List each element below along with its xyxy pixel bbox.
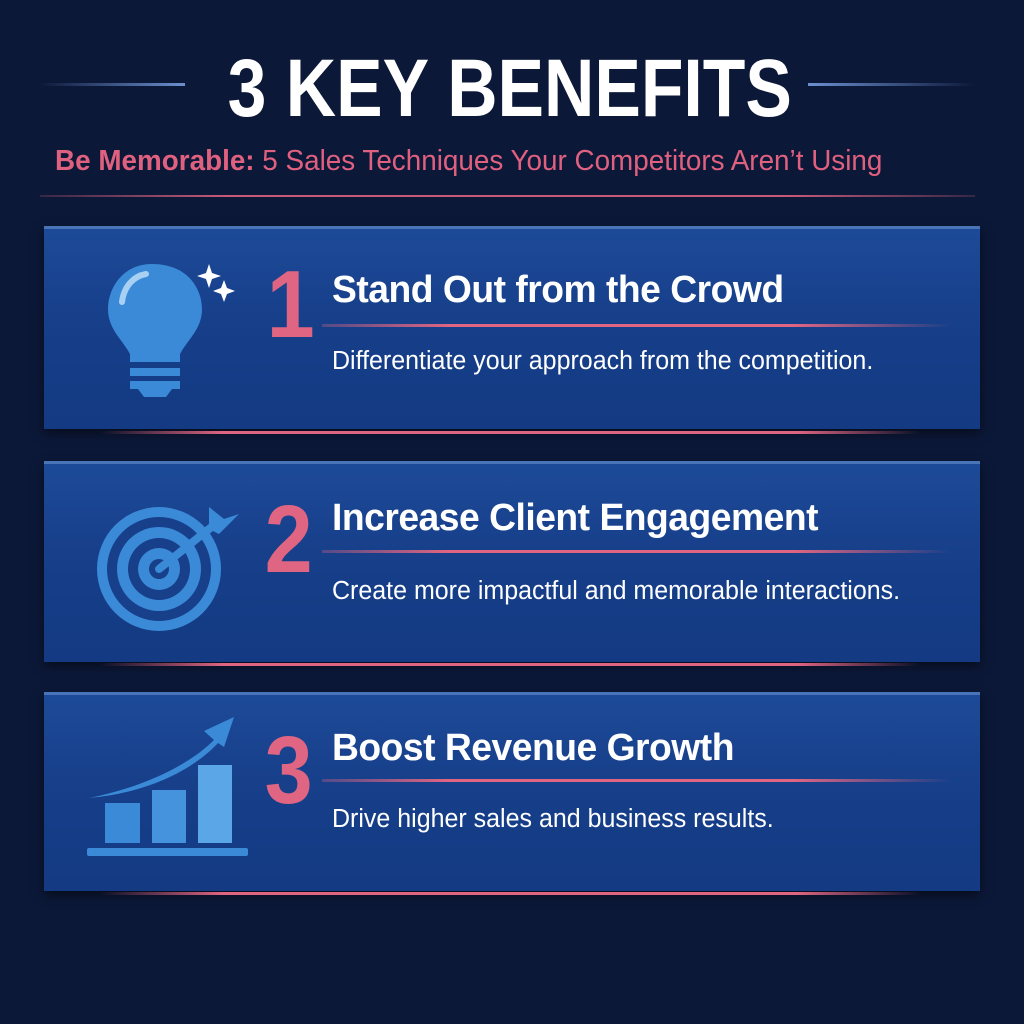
icon: target (97, 507, 239, 631)
icon: bar chart growth (87, 717, 248, 856)
title: 3 KEY BENEFITS (228, 43, 792, 134)
heading: Boost Revenue Growth (332, 727, 734, 769)
panel: 3 (44, 692, 980, 891)
number 1: 1 (267, 251, 315, 358)
description: Create more impactful and memorable interactions. (332, 577, 900, 605)
number 3: 3 (265, 717, 313, 824)
panel: 2 (44, 461, 980, 662)
heading: Increase Client Engagement (332, 497, 818, 539)
icon: light bulb (108, 264, 235, 397)
number 2: 2 (265, 486, 313, 593)
description: Differentiate your approach from the competition. (332, 347, 873, 375)
description: Drive higher sales and business results. (332, 805, 774, 833)
panel: 1 (44, 226, 980, 429)
subtitle: Be Memorable: 5 Sales Techniques Your Competitors Aren’t Using (55, 145, 882, 177)
heading: Stand Out from the Crowd (332, 269, 784, 311)
